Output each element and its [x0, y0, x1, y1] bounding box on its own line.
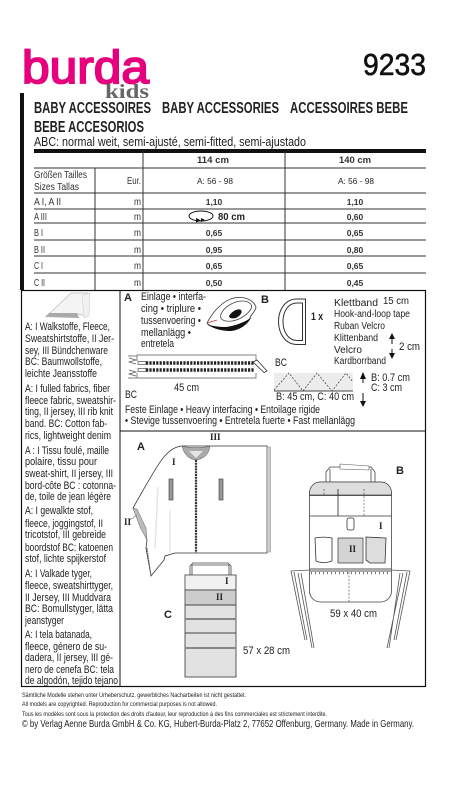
drawing B: seat organizer: B [396, 465, 404, 477]
fabric requirements table: Eur. [127, 176, 141, 187]
panel: notions [124, 291, 420, 427]
text block: French: sweat-shirt, II jersey, III [25, 468, 113, 480]
panel: notions: B [261, 294, 269, 306]
arrow: band width: B: 0.7 cm [371, 372, 410, 384]
fabric requirements table: 0,60 [347, 212, 364, 222]
text block: Swedish [24, 568, 114, 627]
text block: heavy interfacing: • Stevige tussenvoering • Entretela fuerte • Fast mellanlägg [125, 415, 355, 427]
panel: notions: A [124, 292, 132, 304]
fabric requirements table: 0,65 [347, 228, 364, 238]
fabric requirements table: 140 cm [339, 155, 371, 166]
fabric requirements table: 1,10 [347, 197, 364, 207]
fabric requirements table: 0,50 [206, 278, 223, 288]
text block: Swedish: II Jersey, III Muddvara [25, 592, 112, 604]
text block: English: fleece fabric, sweatshir- [25, 395, 116, 407]
text block: Spanish: de algodón, tejido tejano [25, 675, 118, 687]
text block: German: sey, III Bündchenware [25, 345, 108, 357]
fabric requirements table: C II [34, 278, 45, 289]
text block: Dutch: stof, lichte spijkerstof [25, 553, 107, 565]
text block: German: A: I Walkstoffe, Fleece, [25, 321, 110, 333]
drawing B: seat organizer: I [379, 521, 383, 531]
text block: German [25, 321, 114, 380]
panel: garment drawings [124, 432, 410, 677]
text block: heavy interfacing [125, 404, 355, 427]
text block: velcro: Kardborrband [334, 356, 386, 367]
text block: velcro: Klettband [334, 298, 378, 309]
text block: English [25, 383, 116, 442]
text block: interfacing: entretela [141, 338, 175, 350]
text block: English: A: I fulled fabrics, fiber [25, 383, 110, 395]
panel: notions: B: 45 cm, C: 40 cm [276, 391, 354, 403]
text block: interfacing: Einlage • interfa- [141, 291, 206, 303]
fabric requirements table: A: 56 - 98 [338, 176, 374, 186]
fabric requirements table: Größen Tailles [34, 170, 87, 181]
icon: loop 80 cm: 80 cm [218, 212, 245, 223]
fabric requirements table: 0,65 [206, 228, 223, 238]
drawing A: poncho: I [172, 457, 176, 467]
text block: Dutch: boordstof BC: katoenen [25, 542, 113, 554]
heading: titles: BEBE ACCESORIOS [34, 119, 144, 136]
drawing B: seat organizer [291, 464, 410, 648]
text block: Spanish [25, 629, 118, 687]
text block: English: band. BC: Cotton fab- [25, 418, 107, 430]
text block: velcro: Klittenband [334, 333, 378, 344]
text block: Spanish: A: I tela batanada, [25, 629, 92, 641]
text block: Swedish: fleece, sweatshirttyger, [25, 580, 113, 592]
pattern number: 9233 [363, 47, 426, 82]
text block: German: BC: Baumwollstoffe, [25, 356, 102, 368]
icon: zipper [128, 355, 267, 378]
text block: interfacing: tussenvoering • [141, 315, 201, 327]
text block: Spanish: dadera, II jersey, III gé- [25, 652, 113, 664]
drawing A: poncho: A [137, 441, 145, 453]
fabric requirements table: 114 cm [197, 155, 229, 166]
fabric requirements table: m [134, 212, 141, 223]
text block: French: A : I Tissu foulé, maille [25, 445, 109, 457]
heading: titles: BABY ACCESSORIES [162, 100, 279, 117]
fabric requirements table: B I [34, 228, 43, 239]
text block: interfacing [141, 291, 206, 350]
heading: titles: BABY ACCESSOIRES [34, 100, 151, 117]
text block: velcro: Hook-and-loop tape [334, 309, 410, 320]
fabric requirements table: A I, A II [34, 197, 61, 208]
text block: Swedish: A: I Valkade tyger, [25, 568, 92, 580]
icon: band with zigzag [274, 373, 353, 391]
text block: English: rics, lightweight denim [25, 430, 111, 442]
text block: Dutch: tricotstof, III gebreide [25, 529, 106, 541]
fabric requirements table [20, 93, 426, 290]
icon: loop 80 cm [189, 211, 245, 223]
arrow: band width [360, 372, 410, 407]
footer: copyright: All models are copyrighted. Reproduction for commercial purposes is not allowed. [22, 702, 217, 708]
text block: velcro: Velcro [334, 345, 362, 356]
text block: velcro: 15 cm [383, 296, 409, 307]
fabric requirements table: A III [34, 212, 47, 223]
text block: heavy interfacing: Feste Einlage • Heavy interfacing • Entoilage rigide [125, 404, 320, 416]
fabric requirements table: m [134, 245, 141, 256]
drawing A: poncho: III [210, 432, 221, 442]
arrow: 2 cm [389, 333, 420, 359]
text block: German: Sweatshirtstoffe, II Jer- [25, 333, 114, 345]
fabric requirements table: m [134, 261, 141, 272]
fabric requirements table: A: 56 - 98 [197, 176, 233, 186]
panel frames [22, 290, 426, 687]
heading: titles [34, 100, 408, 136]
drawing A: poncho: II [124, 517, 132, 527]
text block: German: leichte Jeansstoffe [25, 368, 97, 380]
fabric requirements table: 1,10 [206, 197, 223, 207]
text block: French: polaire, tissu pour [25, 456, 97, 468]
drawing B: seat organizer: II [349, 544, 357, 554]
fabric requirements table: C I [34, 261, 43, 272]
icon: D-ring [278, 299, 306, 344]
drawing C: hanging organizer: C [164, 609, 172, 621]
icon: iron [206, 297, 256, 331]
text block: interfacing: mellanlägg • [141, 327, 191, 339]
fabric requirements table: 0,65 [347, 261, 364, 271]
fabric requirements table: 0,95 [206, 245, 223, 255]
drawing B: seat organizer: 59 x 40 cm [330, 608, 377, 620]
footer: copyright: Sämtliche Modelle stehen unter Urheberschutz, gewerbliches Nacharbeiten ist nicht gestattet. [22, 693, 246, 699]
text block: velcro [334, 296, 410, 367]
fabric requirements table: m [134, 228, 141, 239]
text block: French: bord-côte BC : cotonna- [25, 480, 116, 492]
logo: burda kids: burda [22, 41, 149, 93]
subtitle: fit: ABC: normal weit, semi-ajusté, semi-fitted, semi-ajustado [34, 134, 306, 149]
footer: copyright [22, 693, 414, 730]
text block: French: de, toile de jean légère [25, 491, 111, 503]
text block: Spanish: nero de cenefa BC: tela [25, 664, 115, 676]
fabric requirements table: m [134, 197, 141, 208]
arrow: band width: C: 3 cm [371, 382, 402, 394]
text block: interfacing: cing • triplure • [141, 303, 201, 315]
drawing A: poncho [124, 432, 270, 576]
arrow: 2 cm: 2 cm [399, 341, 420, 353]
panel: notions: BC [125, 389, 137, 401]
fabric requirements table: m [134, 278, 141, 289]
text block: French [25, 445, 116, 503]
panel: fabric suggestions [24, 293, 118, 687]
panel: notions: BC [275, 357, 287, 369]
drawing C: hanging organizer: II [216, 592, 224, 602]
text block: Swedish: jeanstyger [24, 615, 64, 627]
fabric requirements table: 0,80 [347, 245, 364, 255]
drawing C: hanging organizer [164, 563, 290, 677]
panel: notions: 45 cm [174, 382, 199, 394]
logo: burda kids: kids [105, 81, 149, 103]
drawing C: hanging organizer: I [225, 576, 229, 586]
text block: Dutch [25, 505, 113, 565]
footer: copyright: Tous les modèles sont sous la protection des droits d'auteur, leur reproduction à des fins commerciales est strictement interdite. [22, 712, 327, 718]
fabric requirements table: 0,65 [206, 261, 223, 271]
text block: Spanish: fleece, género de su- [25, 641, 107, 653]
icon: folded fabric [45, 293, 90, 318]
fabric requirements table: B II [34, 245, 45, 256]
drawing C: hanging organizer: 57 x 28 cm [243, 645, 290, 657]
fabric requirements table: 0,45 [347, 278, 364, 288]
text block: Dutch: A: I gewalkte stof, [25, 505, 93, 517]
fabric requirements table: Sizes Tallas [34, 182, 79, 193]
text block: English: ting, II jersey, III rib knit [25, 406, 113, 418]
text block: velcro: Ruban Velcro [334, 321, 385, 332]
text block: Swedish: BC: Bomullstyger, lätta [25, 603, 114, 615]
text block: Dutch: fleece, joggingstof, II [25, 518, 103, 530]
panel: notions: 1 x [311, 311, 324, 323]
heading: titles: ACCESSOIRES BEBE [290, 100, 408, 117]
